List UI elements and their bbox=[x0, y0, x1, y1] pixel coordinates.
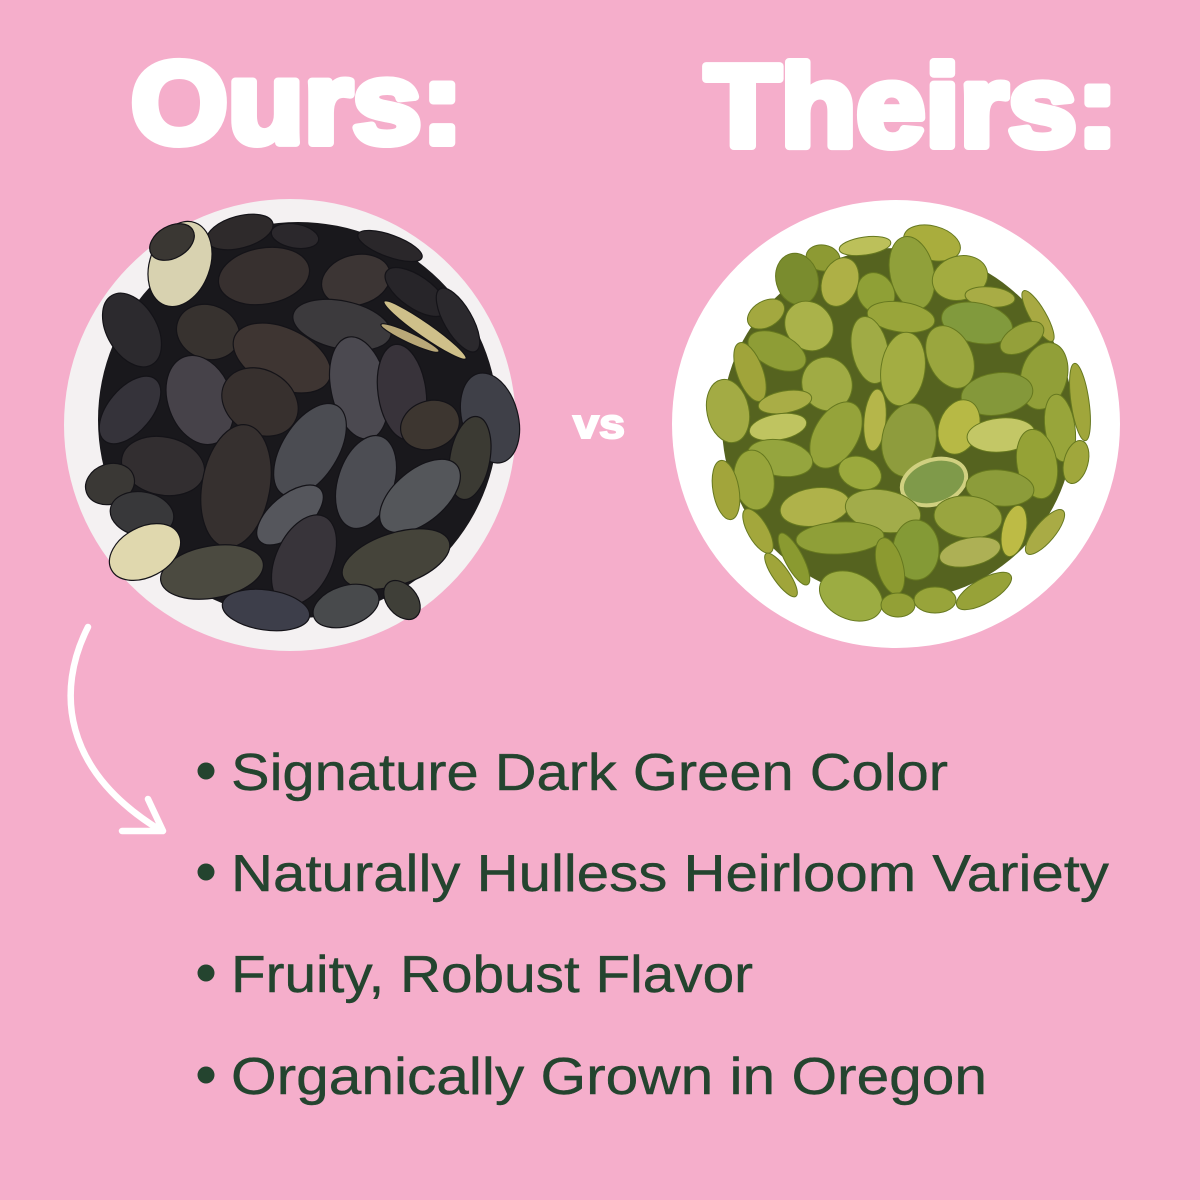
bullet 3: Fruity, Robust Flavor bbox=[231, 946, 753, 1004]
bullet 2: Naturally Hulless Heirloom Variety bbox=[231, 845, 1109, 903]
bowl: ours, dark pumpkin seeds bbox=[64, 199, 529, 651]
bullet 4: Organically Grown in Oregon bbox=[231, 1048, 987, 1106]
list: bullet points bbox=[198, 744, 1109, 1106]
bowl: theirs, green pumpkin seeds bbox=[672, 200, 1120, 648]
label: vs: vs bbox=[573, 400, 625, 447]
heading: Theirs: Theirs: bbox=[705, 41, 1118, 171]
bullet 1: Signature Dark Green Color bbox=[231, 744, 948, 802]
arrow: curved white arrow bbox=[71, 627, 163, 831]
heading: Ours: Ours: bbox=[131, 38, 463, 168]
